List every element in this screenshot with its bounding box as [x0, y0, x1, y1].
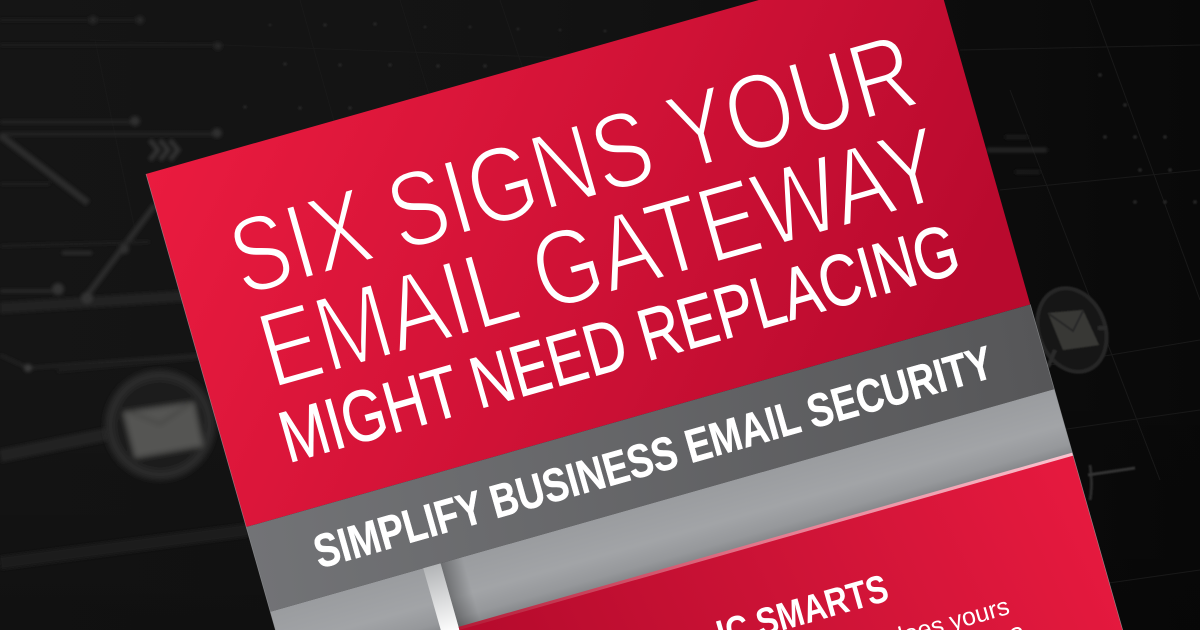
- chevron arrows: [150, 140, 178, 160]
- panel: light grey backdrop: [270, 389, 1147, 630]
- title: [234, 40, 958, 462]
- icon: blurred envelope left: [110, 375, 210, 475]
- white vertical strip: [423, 564, 460, 630]
- panel: red content section: [459, 453, 1144, 630]
- pink highlight line: [459, 453, 1073, 630]
- page edge highlight: [146, 174, 1123, 630]
- title: EMAIL GATEWAY: [246, 103, 955, 411]
- panel: red title header: [146, 0, 1030, 527]
- subtitle: SIMPLIFY BUSINESS EMAIL SECURITY: [308, 335, 998, 578]
- title: MIGHT NEED REPLACING: [271, 209, 968, 478]
- icon: blurred envelope right: [1025, 278, 1135, 500]
- section body text: [898, 602, 1022, 630]
